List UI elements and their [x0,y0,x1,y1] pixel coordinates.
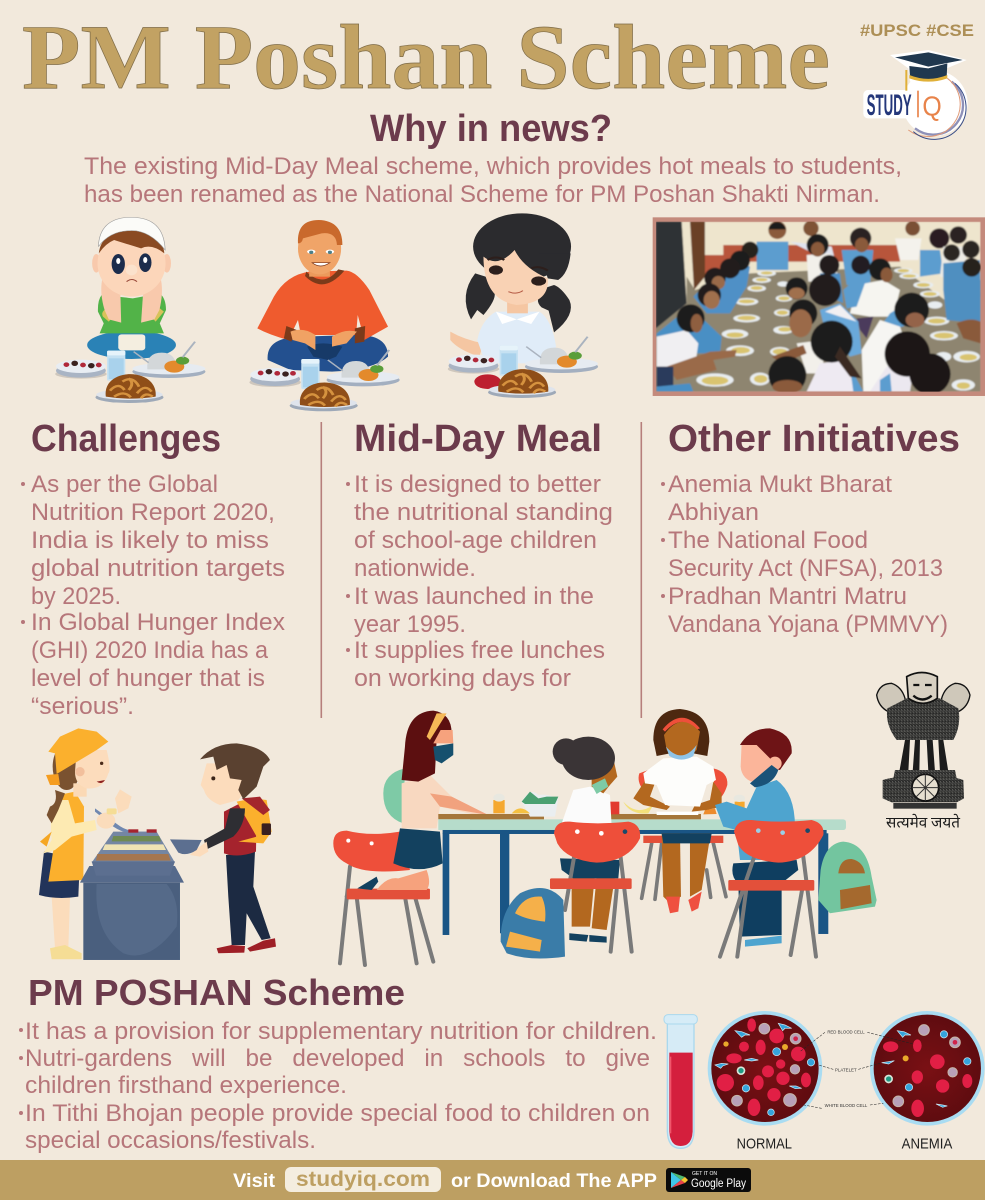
hashtags: #UPSC #CSE [860,21,974,40]
blue backpack [501,888,565,959]
footer: google play badge [666,1168,751,1192]
blood diagram labels: RED BLOOD CELL [827,1030,865,1035]
other initiatives list: The National Food [668,527,868,554]
blood diagram labels: NORMAL [737,1136,792,1152]
blood diagram: test tube and cells [664,1011,985,1152]
heading: PM POSHAN scheme: PM POSHAN Scheme [28,972,405,1013]
girl with pigtails [450,213,571,389]
blood diagram labels: ANEMIA [902,1136,952,1152]
mid-day meal list: It is designed to better [354,471,601,498]
why in news text: has been renamed as the National Scheme for PM Poshan Shakti Nirman. [84,181,880,208]
lion legs [899,740,948,772]
girl at table with mask [333,711,500,965]
footer: google play badge: Google Play [691,1178,746,1190]
challenges list: level of hunger that is [31,665,265,692]
title: PM Poshan Scheme [22,6,830,108]
food set 3 [448,337,598,398]
abacus base [883,776,964,802]
other initiatives list: Pradhan Mantri Matru [668,583,907,610]
mid-day meal list: It was launched in the [354,583,594,610]
student with backpack [170,743,276,953]
photo: children eating mid-day meal [653,217,985,396]
centre group [768,255,900,394]
centre lion head [907,672,937,703]
green backpack [818,842,877,913]
food set 1 [55,342,205,403]
panel: mid-day meal [346,418,613,692]
challenges list: India is likely to miss [31,527,269,554]
mid-day meal list: year 1995. [354,611,466,638]
food set 2 [249,350,400,411]
illustration: children eating on the floor [55,213,598,411]
PM POSHAN list [19,1018,657,1154]
why in news heading: Why in news? [370,108,612,150]
table [470,792,846,934]
PM POSHAN list: It has a provision for supplementary nutrition for children. [25,1018,657,1045]
challenges list: In Global Hunger Index [31,609,285,636]
child with bun [550,737,640,952]
serving counter [80,829,184,960]
challenges list: by 2025. [31,583,121,610]
mid-day meal list: of school-age children [354,527,597,554]
footer bar [0,1160,985,1200]
other initiatives list: Security Act (NFSA), 2013 [668,555,943,582]
challenges list [21,471,285,720]
heading: mid-day meal: Mid-Day Meal [354,418,602,460]
young man in red sweater [257,220,388,372]
back row [757,221,981,343]
anemia blood circle [870,1011,985,1126]
child in blue sweater [715,728,823,957]
PM POSHAN list: children firsthand experience. [25,1072,347,1099]
other initiatives list [661,471,948,638]
challenges list: As per the Global [31,471,218,498]
panel: challenges [21,418,285,720]
other initiatives list: Anemia Mukt Bharat [668,471,892,498]
side lion heads [877,683,905,712]
PM POSHAN list: Nutri-gardens will be developed in schools to give [25,1045,650,1072]
challenges list: (GHI) 2020 India has a [31,637,268,664]
other initiatives list: Abhiyan [668,499,759,526]
left row [657,242,758,392]
logo: StudyIQ: STUDY [867,89,912,122]
right foreground [862,293,951,395]
blood diagram labels [737,1030,952,1152]
PM POSHAN list: special occasions/festivals. [25,1127,316,1154]
mid-day meal list: the nutritional standing [354,499,613,526]
mid-day meal list [346,471,613,692]
why in news text: The existing Mid-Day Meal scheme, which provides hot meals to students, [84,153,902,180]
mid-day meal list: nationwide. [354,555,476,582]
footer: website pill: studyiq.com [296,1168,430,1191]
emblem motto: सत्यमेव जयते [886,813,960,831]
heading: challenges: Challenges [31,418,221,460]
logo: StudyIQ: Q [922,91,942,122]
challenges list: “serious”. [31,693,134,720]
blood diagram labels: PLATELET [835,1067,857,1072]
illustration: cook serving a student [39,711,500,965]
other initiatives list: Vandana Yojana (PMMVY) [668,611,948,638]
cook [39,728,147,959]
footer: visit: Visit [233,1171,276,1192]
mid-day meal list: It supplies free lunches [354,637,605,664]
child with cap [87,217,176,359]
footer: google play badge: GET IT ON [692,1171,717,1177]
illustration: children at school table [470,709,877,959]
panel: other initiatives [661,418,960,638]
footer: download text: or Download The APP [451,1171,657,1192]
test tube [664,1015,697,1148]
challenges list: global nutrition targets [31,555,285,582]
state emblem of India [877,672,970,831]
dharma chakra [912,774,939,801]
normal blood circle [708,1011,822,1126]
child facing viewer [633,709,727,913]
PM POSHAN list: In Tithi Bhojan people provide special food to children on [25,1100,650,1127]
lion manes [887,698,959,740]
logo: StudyIQ [863,50,968,139]
why in news text [84,153,902,208]
challenges list: Nutrition Report 2020, [31,499,275,526]
blood diagram labels: WHITE BLOOD CELL [825,1103,868,1108]
heading: other initiatives: Other Initiatives [668,418,960,460]
mid-day meal list: on working days for [354,665,571,692]
